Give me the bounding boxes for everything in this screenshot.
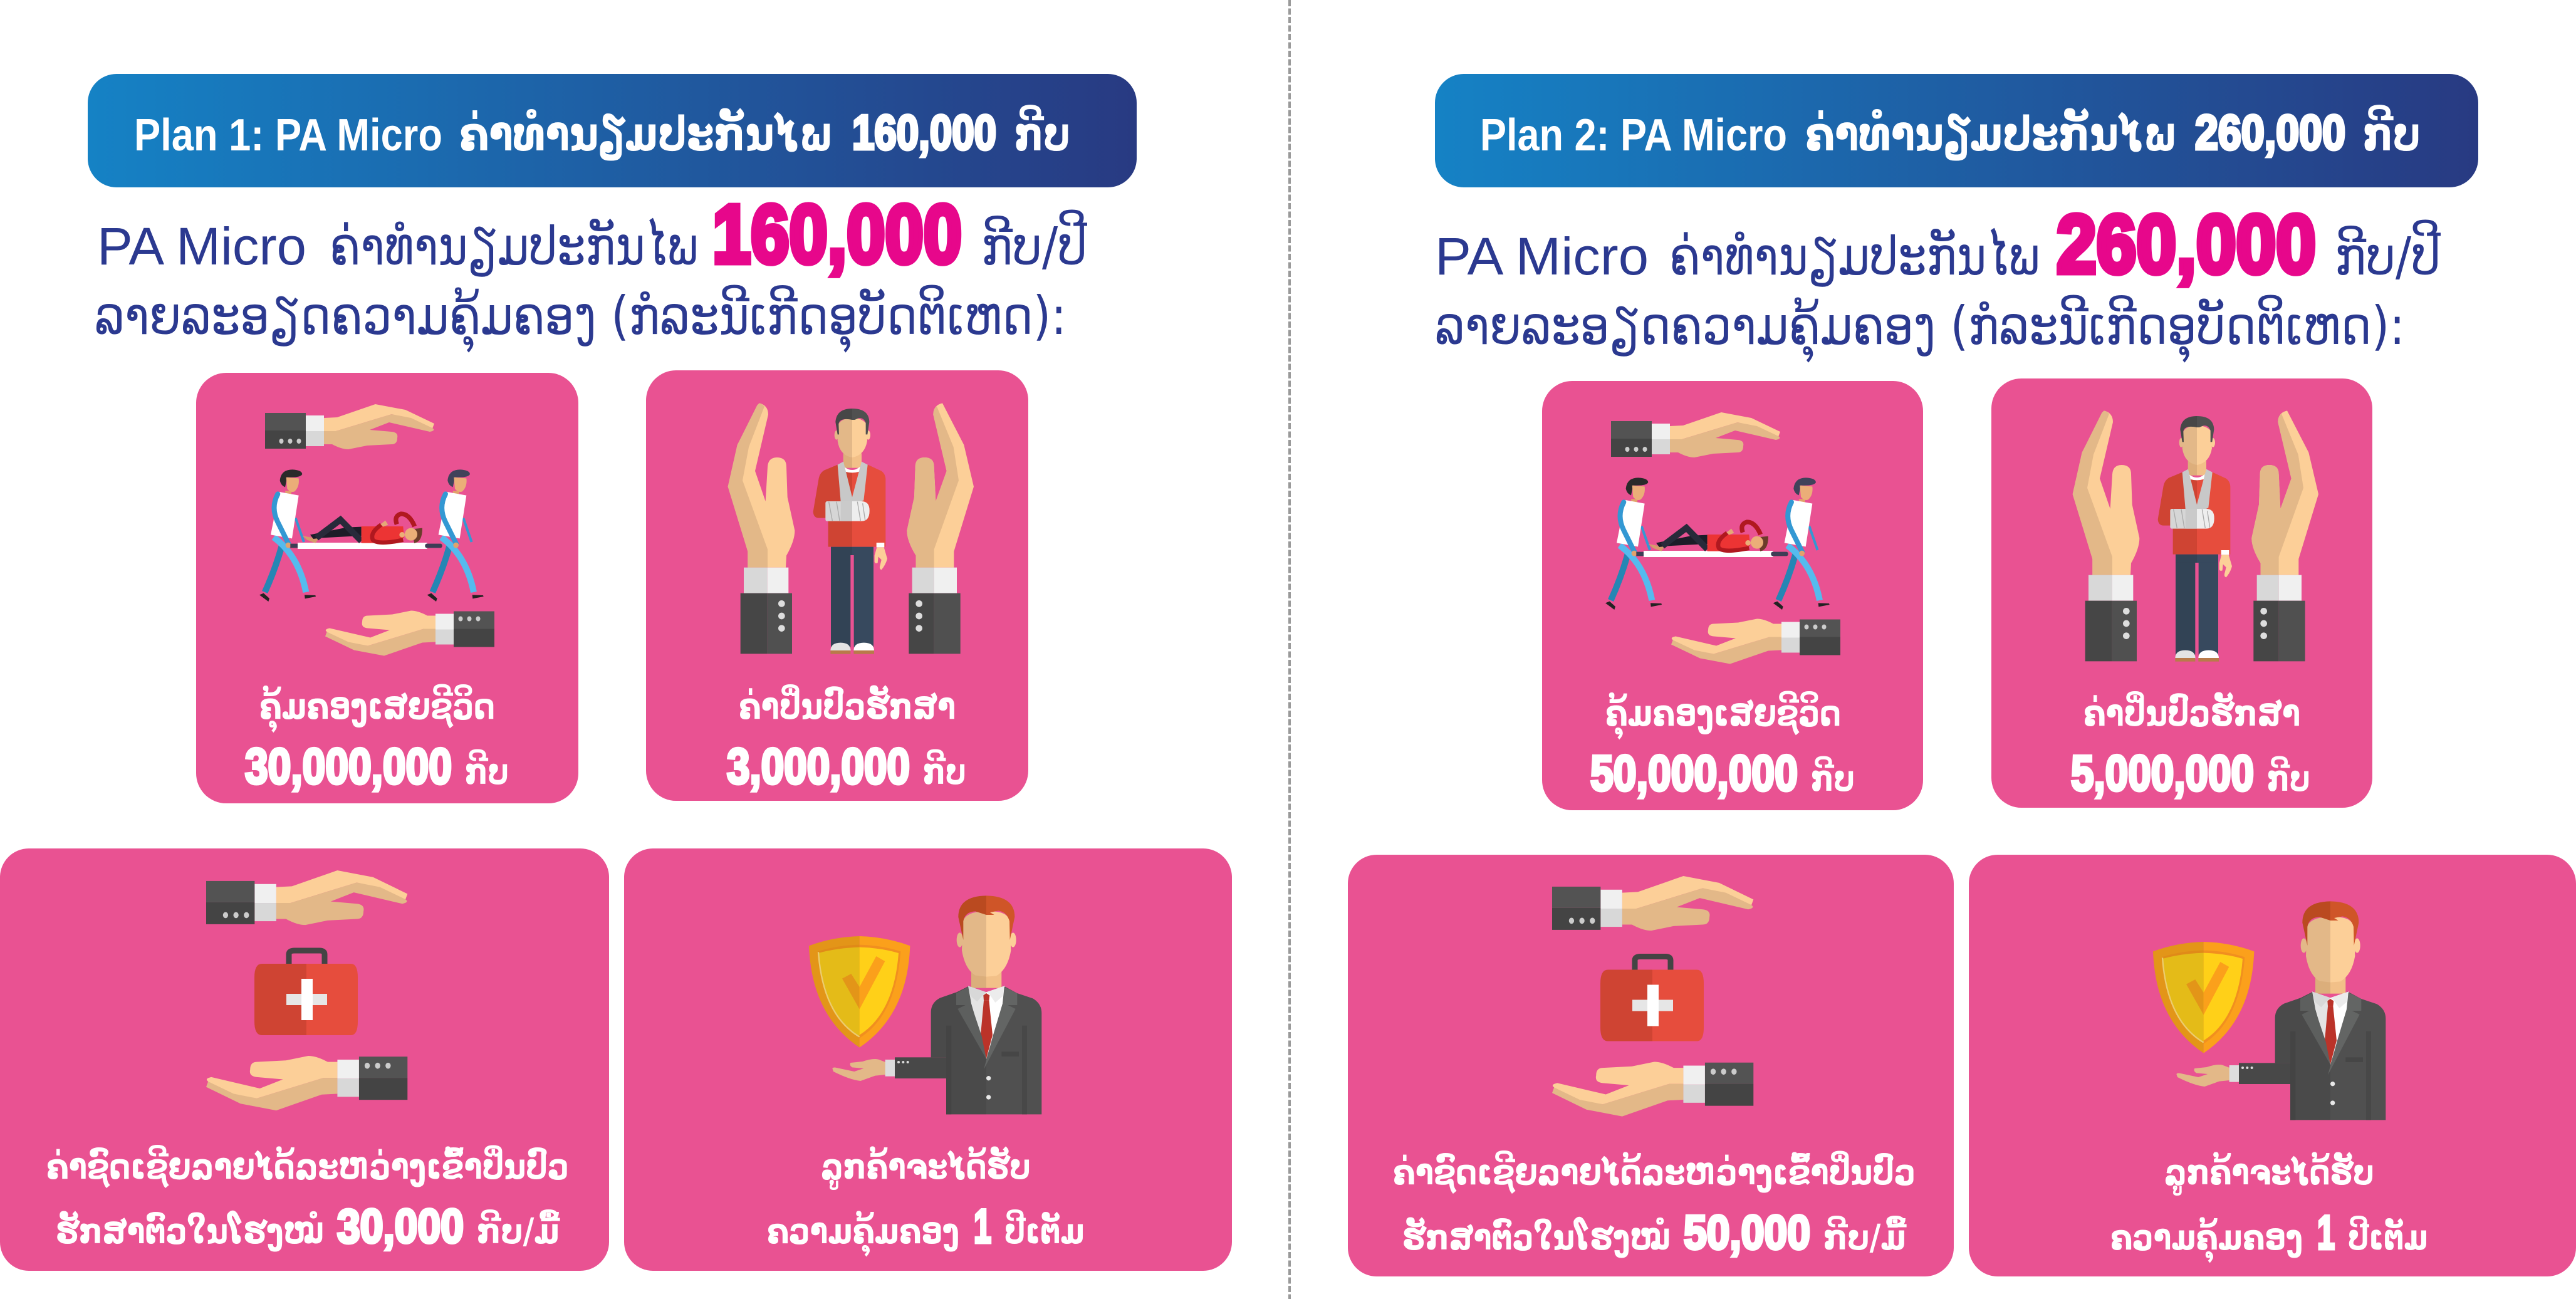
one year cover text (767, 1145, 1085, 1258)
one year cover text: 1 (974, 1200, 991, 1253)
icon: agent with shield (2153, 901, 2386, 1120)
plan 2 coverage heading: ລາຍລະອຽດຄວາມຄຸ້ມຄອງ (ກໍລະນີເກີດອຸບັດຕິເຫດ): (1435, 294, 2405, 363)
income compensation text: ຄ່າຊົດເຊີຍລາຍໄດ້ລະຫວ່າງເຂົ້າປິ່ນປົວ (1393, 1150, 1916, 1194)
income compensation text: 50,000 (1684, 1206, 1810, 1260)
icon: hand bottom (206, 1056, 407, 1110)
medical cover text: ກີບ (923, 748, 966, 793)
death cover text: ຄຸ້ມຄອງເສຍຊີວິດ (259, 683, 495, 733)
icon: hand top (1611, 412, 1780, 457)
plan 1 banner: Plan 1: PA Micro (134, 110, 442, 160)
plan 1 premium line (97, 188, 1087, 280)
medical cover text: ກີບ (2267, 755, 2310, 800)
income compensation text: ຮັກສາຕົວໃນໂຮງໝໍ (56, 1210, 324, 1252)
death cover text (1590, 690, 1855, 801)
death cover text (245, 683, 509, 794)
plan 1 section (0, 74, 1232, 1271)
income compensation text: ກີບ/ມື້ (477, 1209, 560, 1252)
plan 2 section (1348, 74, 2576, 1276)
income compensation text: ຮັກສາຕົວໃນໂຮງໝໍ (1402, 1216, 1671, 1258)
one year cover text (2110, 1151, 2428, 1264)
one year cover text: ຄວາມຄຸ້ມຄອງ (2110, 1217, 2303, 1264)
icon: hand top (206, 870, 407, 925)
one year cover text: ລູກຄ້າຈະໄດ້ຮັບ (821, 1145, 1031, 1190)
income compensation text (1393, 1150, 1916, 1260)
panel: death cover (196, 373, 578, 803)
plan 2 premium line: ຄ່າທຳນຽມປະກັນໄພ (1669, 226, 2040, 287)
plan 1 premium line: 160,000 (712, 188, 962, 280)
icon: first aid kit (254, 951, 358, 1035)
plan 2 banner: 260,000 (2195, 105, 2345, 160)
icon: hand bottom (325, 610, 494, 655)
plan 2 banner: Plan 2: PA Micro (1480, 110, 1787, 160)
plan 1 banner: ກີບ (1014, 104, 1070, 162)
plan 1 premium line: PA Micro (97, 217, 306, 276)
income compensation text: 30,000 (337, 1200, 464, 1253)
panel: one year cover plan 2 (1969, 855, 2576, 1276)
one year cover text: ລູກຄ້າຈະໄດ້ຮັບ (2164, 1151, 2374, 1196)
medical cover text (2071, 690, 2310, 801)
plan 2 banner (1435, 74, 2478, 187)
panel: death cover plan 2 (1542, 381, 1923, 810)
death cover text: ຄຸ້ມຄອງເສຍຊີວິດ (1605, 690, 1841, 740)
plan 2 premium line: PA Micro (1435, 227, 1649, 286)
plan 2 premium line: 260,000 (2057, 198, 2316, 290)
death cover text: 50,000,000 (1590, 745, 1798, 801)
medical cover text (727, 683, 966, 794)
plan 2 banner: ຄ່າທຳນຽມປະກັນໄພ (1805, 106, 2177, 162)
icon: hand bottom (1671, 619, 1840, 664)
icon: hand bottom (1552, 1062, 1753, 1117)
panel: medical cover plan 2 (1991, 378, 2372, 808)
plan 1 banner (88, 74, 1137, 187)
panel: medical cover (646, 370, 1028, 801)
panel: income compensation (0, 848, 609, 1271)
icon: hand top (265, 404, 434, 449)
income compensation text: ຄ່າຊົດເຊີຍລາຍໄດ້ລະຫວ່າງເຂົ້າປິ່ນປົວ (46, 1144, 569, 1189)
plan 1 coverage heading: ລາຍລະອຽດຄວາມຄຸ້ມຄອງ (ກໍລະນີເກີດອຸບັດຕິເຫດ): (95, 284, 1066, 353)
medical cover text: 3,000,000 (727, 738, 910, 794)
panel: income compensation plan 2 (1348, 855, 1954, 1276)
one year cover text: 1 (2317, 1206, 2335, 1260)
plan 1 premium line: ກີບ/ປີ (981, 209, 1087, 277)
icon: injured man between hands (2073, 410, 2318, 662)
plan 1 banner: 160,000 (852, 105, 996, 160)
medical cover text: 5,000,000 (2071, 745, 2254, 801)
death cover text: 30,000,000 (245, 738, 452, 794)
one year cover text: ປີເຕັມ (1004, 1209, 1085, 1252)
plan 2 banner: ກີບ (2363, 104, 2421, 162)
plan 2 premium line (1435, 198, 2441, 290)
icon: hand top (1552, 876, 1753, 931)
vertical dashed divider (1288, 0, 1291, 1299)
one year cover text: ຄວາມຄຸ້ມຄອງ (767, 1211, 959, 1258)
medical cover text: ຄ່າປິ່ນປົວຮັກສາ (2083, 690, 2300, 734)
income compensation text (46, 1144, 569, 1253)
income compensation text: ກີບ/ມື້ (1823, 1215, 1907, 1258)
death cover text: ກີບ (1811, 755, 1855, 800)
medical cover text: ຄ່າປິ່ນປົວຮັກສາ (739, 683, 956, 728)
icon: injured man between hands (728, 403, 974, 654)
icon: first aid kit (1600, 956, 1704, 1041)
plan 1 premium line: ຄ່າທຳນຽມປະກັນໄພ (330, 216, 698, 277)
plan 1 banner: ຄ່າທຳນຽມປະກັນໄພ (459, 106, 833, 162)
icon: stretcher (1605, 477, 1830, 610)
icon: agent with shield (809, 895, 1041, 1114)
panel: one year cover (624, 848, 1232, 1271)
plan 2 premium line: ກີບ/ປີ (2335, 219, 2441, 287)
death cover text: ກີບ (465, 748, 509, 793)
one year cover text: ປີເຕັມ (2348, 1215, 2428, 1258)
icon: stretcher (259, 469, 484, 602)
